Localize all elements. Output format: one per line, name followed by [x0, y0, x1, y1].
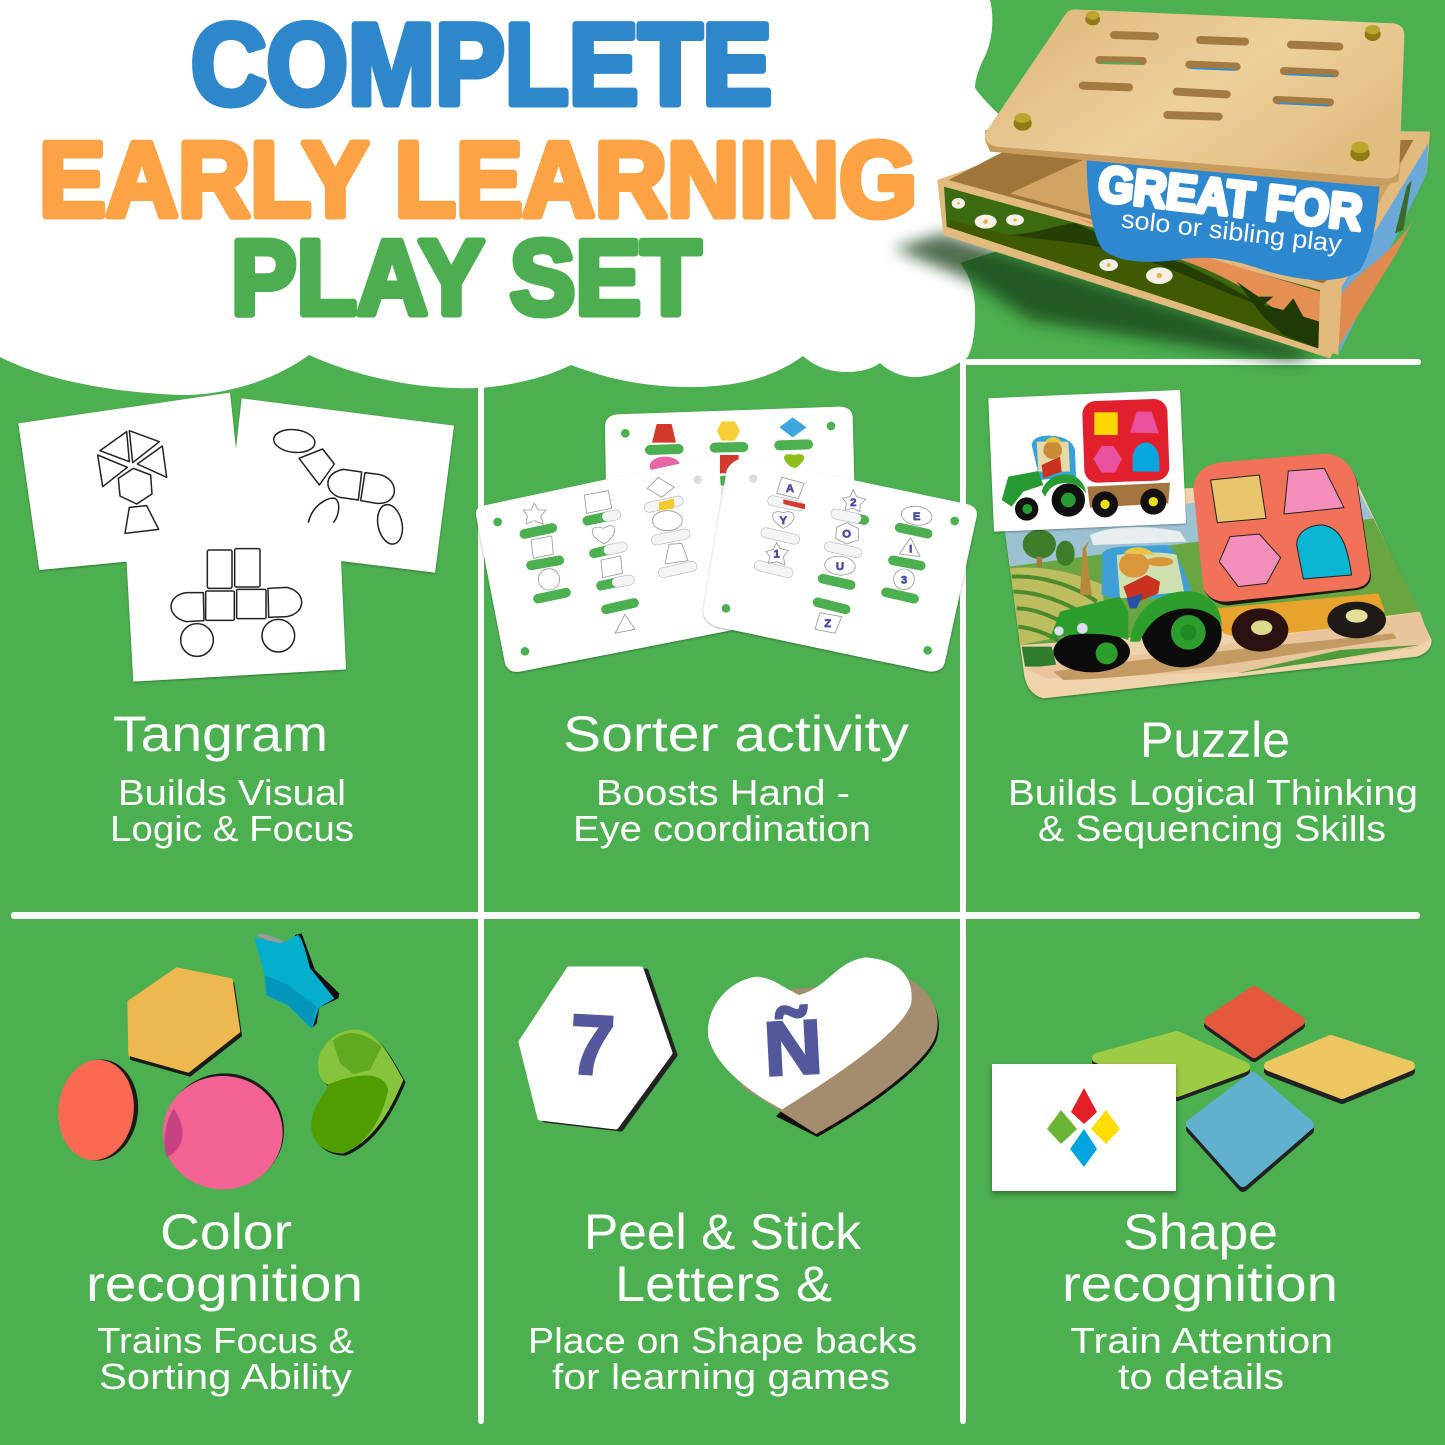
description: Shape recognition: to details — [1118, 1356, 1284, 1397]
description: Color recognition — [97, 1320, 354, 1397]
box body — [937, 127, 1430, 358]
sorter boards: 1 — [774, 549, 780, 561]
sorter boards: I — [909, 544, 912, 556]
heading: Shape recognition — [1062, 1204, 1338, 1312]
description: Peel & Stick Letters: for learning games — [552, 1356, 890, 1397]
heading: Color recognition: recognition — [86, 1256, 363, 1312]
heading: Shape recognition: recognition — [1062, 1256, 1338, 1312]
wooden box product with badge — [893, 9, 1430, 362]
title line: EARLY LEARNING: EARLY LEARNING — [39, 121, 917, 239]
title line: COMPLETE: COMPLETE — [191, 1, 772, 129]
title — [39, 1, 917, 337]
description: Puzzle: Builds Logical Thinking — [1008, 772, 1418, 813]
badge: great for — [1087, 155, 1380, 280]
grid lines — [11, 355, 1421, 1424]
heading: Peel & Stick Letters: Peel & Stick — [584, 1204, 862, 1260]
heading: Shape recognition: Shape — [1123, 1204, 1278, 1260]
sorter boards: E — [913, 511, 921, 523]
letter 7: 7 — [568, 997, 616, 1093]
panel: tangram — [18, 393, 454, 849]
badge: great for: solo or sibling play — [1120, 205, 1344, 258]
description: Puzzle — [1008, 772, 1418, 849]
panel: peel and stick letters — [521, 957, 939, 1397]
card diamond icon — [1047, 1088, 1120, 1167]
wooden tractor puzzle — [988, 390, 1432, 698]
panel: puzzle — [988, 390, 1432, 849]
tangram outline cards — [18, 393, 454, 682]
description: Color recognition: Trains Focus & — [97, 1320, 354, 1361]
cloud header background — [0, 0, 1010, 395]
heading: Puzzle: Puzzle — [1140, 712, 1290, 768]
heading: Tangram: Tangram — [113, 706, 328, 762]
description: Shape recognition: Train Attention — [1070, 1320, 1333, 1361]
description: Peel & Stick Letters: Place on Shape backs — [528, 1320, 917, 1361]
heading: Color recognition: Color — [160, 1204, 292, 1260]
sorter boards — [476, 407, 977, 672]
panel: shape recognition — [992, 991, 1410, 1397]
description: Peel & Stick Letters — [528, 1320, 917, 1397]
letter N tilde: Ñ — [762, 1005, 824, 1092]
peel and stick shapes — [521, 957, 939, 1137]
heading: Peel & Stick Letters — [584, 1204, 862, 1312]
description: Sorter activity — [573, 772, 871, 849]
sorter boards: O — [842, 528, 851, 540]
description: Tangram: Builds Visual — [118, 772, 346, 813]
sorter boards: 3 — [901, 575, 907, 587]
heading: Peel & Stick Letters: Letters & — [615, 1256, 832, 1312]
sorter boards: A — [786, 483, 794, 495]
sorter boards: U — [836, 561, 844, 573]
box lid — [985, 9, 1404, 187]
heading: Color recognition — [86, 1204, 363, 1312]
sorter boards: Y — [780, 515, 788, 527]
description: Tangram: Logic & Focus — [110, 808, 354, 849]
title line: PLAY SET: PLAY SET — [231, 219, 701, 337]
description: Shape recognition — [1070, 1320, 1333, 1397]
description: Puzzle: & Sequencing Skills — [1038, 808, 1386, 849]
heading: Sorter activity: Sorter activity — [563, 706, 909, 762]
description: Sorter activity: Boosts Hand - — [596, 772, 850, 813]
coloured shape pieces — [53, 933, 406, 1189]
rhombus pieces and reference card — [992, 991, 1410, 1191]
panel: color recognition — [53, 933, 406, 1397]
description: Sorter activity: Eye coordination — [573, 808, 871, 849]
description: Color recognition: Sorting Ability — [99, 1356, 352, 1397]
sorter boards: 2 — [850, 497, 856, 509]
instruction card — [988, 390, 1186, 532]
sorter boards: Z — [824, 618, 831, 630]
panel: sorter activity — [476, 407, 977, 849]
badge: great for: GREAT FOR — [1096, 155, 1365, 241]
box shadow — [893, 233, 1320, 362]
description: Tangram — [110, 772, 354, 849]
